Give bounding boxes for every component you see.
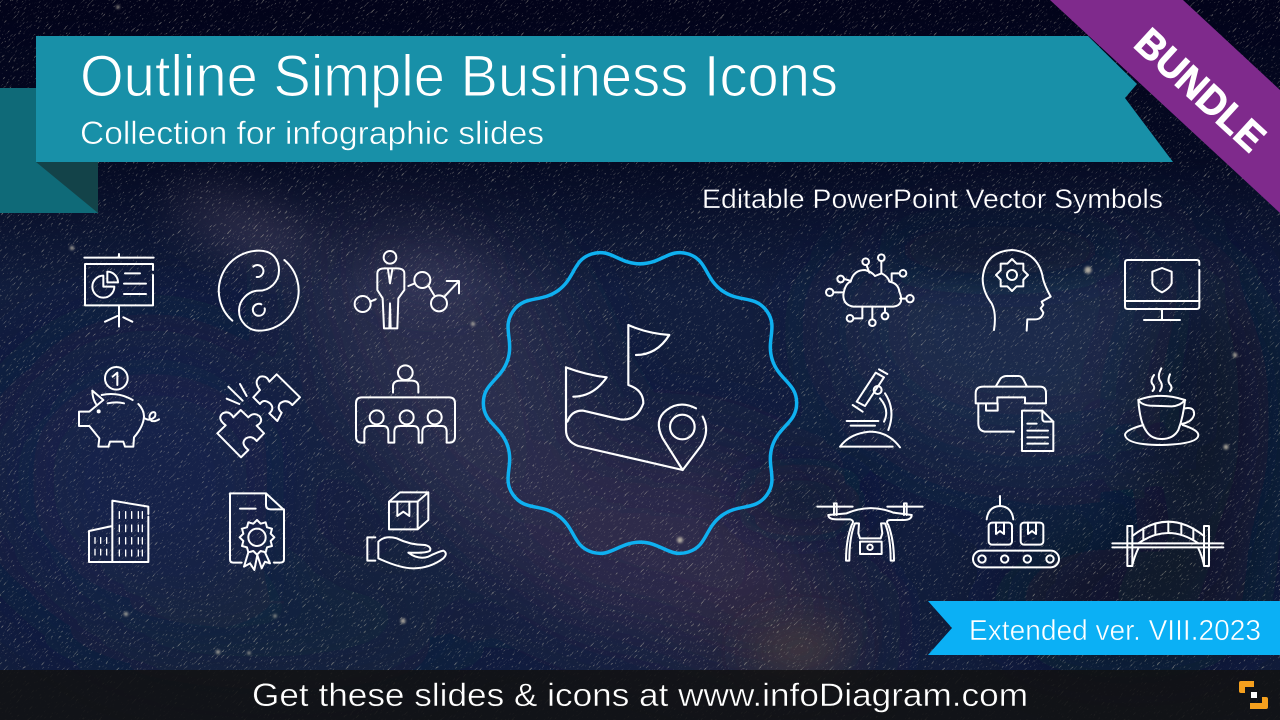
icon: coffee cup: [1125, 368, 1198, 445]
icon: presentation board: [84, 254, 154, 327]
right icon grid: [817, 250, 1223, 567]
tagline: Editable PowerPoint Vector Symbols: [702, 184, 1163, 214]
subtitle: Collection for infographic slides: [80, 115, 544, 151]
icon: cloud network: [826, 254, 914, 326]
icon: hand holding box: [367, 492, 446, 568]
icon: meeting table: [356, 365, 455, 443]
bundle label: BUNDLE: [1126, 20, 1274, 161]
icon: infoDiagram logo: [1239, 681, 1268, 709]
icon: monitor with shield: [1125, 260, 1199, 320]
icon: certificate: [230, 493, 284, 570]
icon: toolbox with document: [976, 376, 1053, 451]
scalloped badge outline: [483, 241, 797, 565]
icon: head with gear: [983, 250, 1051, 331]
icon: puzzle pieces: [217, 374, 300, 457]
title banner: [36, 36, 1173, 162]
icon: microscope: [840, 369, 900, 447]
icon: drone with camera: [817, 503, 923, 561]
footer link text: Get these slides & icons at www.infoDiagram.com: [252, 677, 1028, 713]
icon: businessman with nodes: [355, 251, 459, 328]
icon: conveyor belt with boxes: [973, 496, 1059, 567]
ribbon fold: back flap: [0, 88, 98, 213]
bundle corner ribbon: [1050, 0, 1280, 213]
version ribbon: [928, 601, 1280, 655]
title: Outline Simple Business Icons: [80, 44, 838, 109]
icon: flags route with map pin: [566, 325, 706, 470]
footer bar: [0, 670, 1280, 720]
left icon grid: [79, 251, 459, 570]
icon: yin yang: [219, 251, 299, 331]
version label: Extended ver. VIII.2023: [969, 615, 1261, 647]
center badge: [483, 241, 797, 565]
icon: piggy bank: [79, 367, 159, 447]
icon: arch bridge: [1112, 522, 1223, 566]
icon: office buildings: [89, 501, 148, 562]
